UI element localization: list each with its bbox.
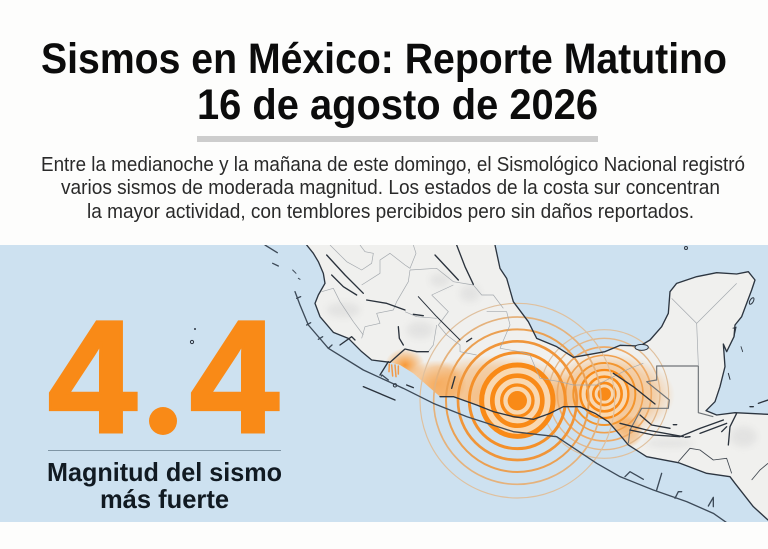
map of southern Mexico [265,245,768,523]
intro text: varios sismos de moderada magnitud. Los estados de la costa sur concentran [61,177,720,199]
lagoon and islands [393,297,755,387]
big number: . [153,355,175,444]
orange coastal fingers [389,364,398,377]
intro text [41,154,745,223]
panel: map [0,245,768,523]
number caption: más fuerte [100,484,229,514]
number caption [48,462,281,508]
title divider [197,136,598,142]
Central America borders [678,448,768,480]
faults of Chiapas and Central America [613,347,768,445]
intro text: la mayor actividad, con temblores percibidos pero sin daños reportados. [87,201,694,223]
number divider [48,450,281,451]
seismic rings: secondary epicentre [540,330,669,458]
big number: 4 [48,287,137,466]
title: 16 de agosto de 2026 [197,81,598,129]
seismic rings: main epicentre [420,303,615,498]
small islands [190,246,688,344]
shake glow on land [385,348,675,448]
big number: 4 [190,287,279,466]
land [307,245,768,523]
subduction trench [265,245,727,523]
international border [628,366,713,443]
coastline [307,245,768,520]
terrain shading [327,273,757,447]
title [41,35,727,129]
number caption: Magnitud del sismo [47,457,282,487]
state borders [322,245,737,385]
intro text: Entre la medianoche y la mañana de este domingo, el Sismológico Nacional registró [41,154,745,176]
fault lines [327,245,473,400]
big number [48,320,280,435]
